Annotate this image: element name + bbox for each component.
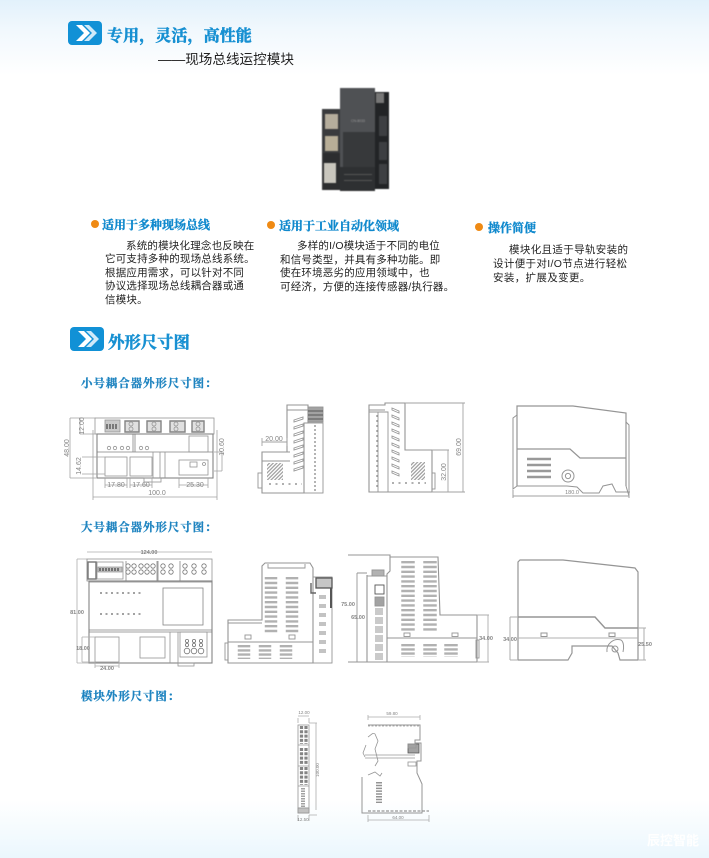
drawing: large coupler front: 24.00 — [100, 666, 114, 672]
text block: column 1: 信模块。 — [105, 294, 148, 306]
heading: dimensions: 外形尺寸图 — [108, 328, 190, 352]
drawing: small coupler front: 17.80 — [107, 482, 125, 489]
drawing: large coupler front: 124.00 — [141, 550, 157, 556]
bullet: column 1 — [91, 220, 99, 228]
drawing: small coupler end view: 180.0 — [565, 490, 579, 496]
heading: column 1: 适用于多种现场总线 — [102, 216, 210, 233]
drawing: small coupler front: 10.60 — [219, 438, 226, 456]
bullet: column 2 — [267, 221, 275, 229]
text block: column 1: 系统的模块化理念也反映在 — [126, 240, 254, 252]
drawing: module front: 100.00 — [315, 763, 320, 777]
drawing: large coupler end view: 34.00 — [503, 637, 517, 643]
drawing: large coupler end view — [503, 560, 652, 660]
drawing: large coupler right side: 34.00 — [479, 636, 493, 642]
text block: column 1: 它可支持多种的现场总线系统。 — [105, 253, 255, 265]
drawing: large coupler right side: 65.00 — [351, 615, 365, 621]
drawing: large coupler right side — [341, 555, 493, 662]
heading: column 2: 适用于工业自动化领域 — [279, 216, 399, 234]
icon: section arrow dimensions — [70, 327, 104, 351]
text block: column 3: 安装，扩展及变更。 — [493, 272, 591, 284]
drawing: small coupler right side: 69.00 — [456, 438, 463, 456]
text block: column 2: 和信号类型，并具有多种功能。即 — [280, 254, 440, 266]
drawing: large coupler front — [70, 550, 212, 672]
drawing: module front: 12.00 — [298, 710, 310, 715]
drawing: small coupler front: 12.00 — [79, 417, 86, 435]
label: small coupler: 小号耦合器外形尺寸图： — [81, 374, 217, 390]
drawing: small coupler front: 48.00 — [64, 439, 71, 457]
subheading: ——现场总线运控模块 — [158, 52, 294, 67]
text block: column 1: 根据应用需求，可以针对不同 — [105, 267, 244, 279]
drawing: large coupler front: 81.00 — [70, 610, 84, 616]
drawing: small coupler front: 25.30 — [186, 482, 204, 489]
text block: column 2: 可经济，方便的连接传感器/执行器。 — [280, 281, 454, 293]
text block: column 3: 模块化且适于导轨安装的 — [509, 244, 628, 256]
heading: product title: 专用，灵活，高性能 — [107, 23, 252, 46]
label: large coupler: 大号耦合器外形尺寸图： — [81, 518, 217, 534]
text block: column 2: 使在环境恶劣的应用领域中，也 — [280, 267, 430, 279]
watermark: 辰控智能 — [647, 833, 699, 848]
drawing: large coupler left side — [225, 563, 332, 663]
bullet: column 3 — [475, 223, 483, 231]
product photo: CN-8033 — [351, 119, 365, 123]
text block: column 2 — [280, 240, 454, 293]
drawing: small coupler front: 100.0 — [148, 490, 166, 497]
drawing: module side — [362, 711, 429, 822]
text block: column 3 — [493, 244, 628, 284]
drawing: small coupler left side — [258, 405, 323, 493]
drawing: large coupler right side: 75.00 — [341, 602, 355, 608]
drawing: module side: 64.00 — [392, 815, 404, 820]
drawing: large coupler end view: 25.50 — [638, 642, 652, 648]
icon: section arrow top — [68, 21, 102, 45]
drawing: module front — [297, 710, 320, 822]
heading: column 3: 操作简便 — [488, 219, 536, 236]
drawing: module side: 59.80 — [386, 711, 398, 716]
drawing: small coupler right side — [369, 403, 465, 492]
drawing: small coupler right side: 32.00 — [441, 463, 448, 481]
text block: column 3: 设计便于对I/O节点进行轻松 — [493, 258, 627, 270]
drawing: small coupler front: 17.60 — [132, 482, 150, 489]
text block: column 1: 协议选择现场总线耦合器或通 — [105, 280, 244, 292]
drawing: small coupler end view — [513, 406, 630, 498]
drawing: small coupler front — [64, 417, 226, 500]
drawing: small coupler left side: 20.00 — [265, 436, 283, 443]
drawing: small coupler front: 14.62 — [76, 457, 83, 475]
text block: column 2: 多样的I/O模块适于不同的电位 — [297, 240, 440, 252]
text block: column 1 — [105, 240, 255, 306]
label: module: 模块外形尺寸图： — [81, 688, 180, 704]
drawing: module front: 12.50 — [297, 817, 309, 822]
drawing: large coupler front: 18.00 — [76, 646, 90, 652]
